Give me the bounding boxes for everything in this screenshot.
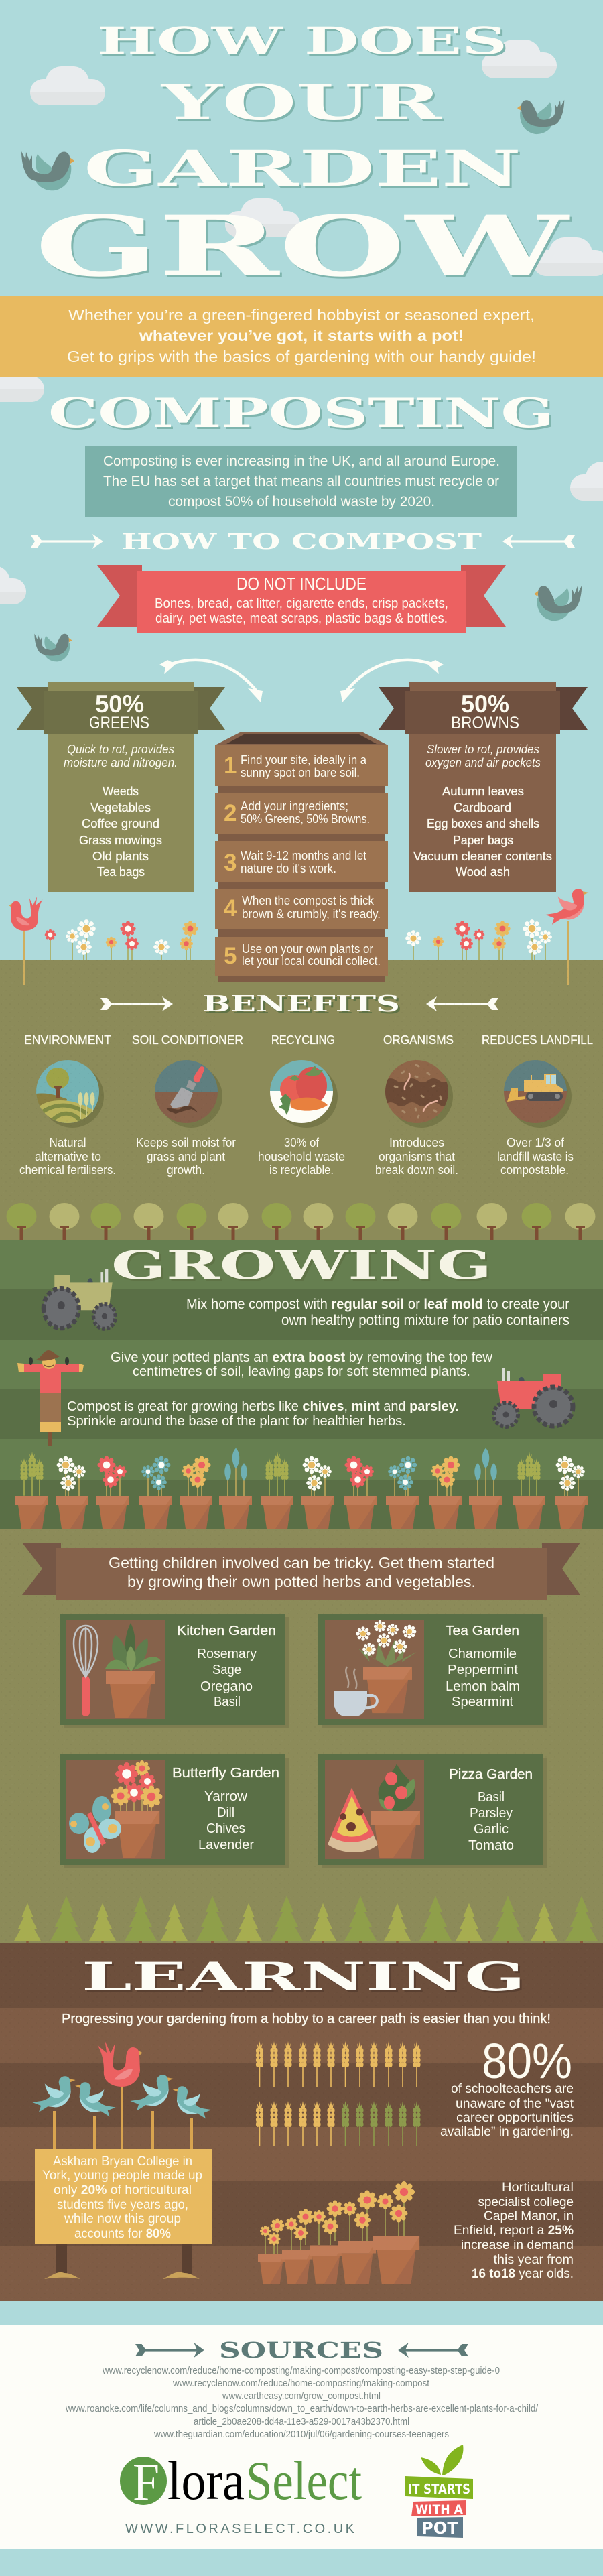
benefit descriptions: household waste	[258, 1150, 345, 1163]
panel: 50% browns: Wood ash	[456, 865, 510, 879]
clouds in the header sky	[0, 40, 603, 604]
logo: FloraSelect: lora	[168, 2450, 245, 2511]
card: butterfly garden	[60, 1754, 289, 1868]
composting intro panel: The EU has set a target that means all countries must recycle or	[103, 474, 499, 489]
card: kitchen garden: Basil	[214, 1695, 241, 1710]
heading: how to compost: HOW TO COMPOST	[121, 529, 482, 554]
panel: sources: article_2b0ae208-dd4a-11e3-a529-0017a43b2370.html	[194, 2417, 409, 2427]
icon: red tractor	[494, 1368, 573, 1427]
statistic: Capel Manor: 16 to18 year olds.	[472, 2267, 574, 2281]
ribbon: do not include: DO NOT INCLUDE	[237, 574, 366, 594]
signboard: Askham Bryan College: accounts for 80%	[74, 2227, 171, 2241]
benefit descriptions	[19, 1136, 574, 1177]
heading: sources	[135, 2337, 468, 2363]
card: pizza garden: Garlic	[474, 1822, 509, 1837]
birds on posts	[32, 2041, 212, 2154]
heading: sources: SOURCES	[219, 2337, 383, 2363]
benefit descriptions: compostable.	[500, 1163, 569, 1177]
title	[35, 19, 570, 296]
logo: It Starts With A Pot: POT	[421, 2518, 458, 2538]
compost bin with five steps: sunny spot on bare soil.	[241, 766, 360, 779]
icon: chamomile pot and cup	[334, 1622, 417, 1716]
panel: sources: www.eartheasy.com/grow_compost.html	[222, 2391, 381, 2402]
row of round trees	[7, 1203, 595, 1243]
panel: 50% greens: Weeds	[103, 785, 139, 798]
panel: sources	[0, 2325, 603, 2549]
heading: benefits	[100, 990, 498, 1017]
icon: pizza slice and tomato plant	[328, 1764, 420, 1858]
panel: 50% browns: 50%	[461, 690, 509, 718]
statistic: 80% of schoolteachers: career opportunities	[456, 2111, 574, 2125]
statistic: 80% of schoolteachers: unaware of the "vast	[456, 2097, 574, 2111]
panel: 50% browns: Slower to rot, provides	[427, 743, 539, 756]
benefit descriptions: is recyclable.	[269, 1163, 334, 1177]
heading: learning: LEARNING	[82, 1954, 525, 2000]
panel: 50% browns: Cardboard	[454, 801, 511, 814]
benefit descriptions: Introduces	[389, 1136, 444, 1149]
panel: sources: www.roanoke.com/life/columns_and_blogs/columns/down_to_earth/down-to-earth-herbs-are-excellent-plants-for-a-child/	[65, 2404, 539, 2414]
card: pizza garden: Tomato	[468, 1838, 514, 1853]
benefit descriptions: landfill waste is	[497, 1150, 574, 1163]
icon: olive tractor	[44, 1269, 115, 1329]
card: tea garden: Peppermint	[448, 1663, 518, 1677]
icon: tomatoes and carrot	[270, 1060, 338, 1128]
ribbon: do not include: Bones, bread, cat litter, cigarette ends, crisp packets,	[155, 596, 448, 611]
icon: scarecrow	[17, 1350, 84, 1446]
compost bin with five steps: 4	[224, 895, 237, 921]
growing tips text: Mix home compost with regular soil or leaf mold to create your	[186, 1297, 570, 1312]
compost bin with five steps: 5	[224, 943, 237, 969]
statistic: Capel Manor: Capel Manor, in	[484, 2209, 574, 2224]
arrows into compost bin	[159, 660, 444, 702]
title: GROW	[35, 198, 570, 296]
row of pine trees	[14, 1896, 598, 1945]
statistic: 80% of schoolteachers: 80%	[482, 2033, 572, 2089]
row of potted plants	[15, 1448, 588, 1529]
icon: birds beside ribbon	[34, 586, 582, 661]
panel: 50% greens: Tea bags	[97, 865, 145, 879]
growing tips text: Give your potted plants an extra boost by removing the top few	[111, 1350, 493, 1365]
card: butterfly garden: Lavender	[198, 1838, 254, 1852]
card: kitchen garden: Kitchen Garden	[177, 1624, 276, 1638]
panel: growing field stripes	[0, 1240, 603, 1529]
benefit column headings	[24, 1033, 593, 1047]
panel: 50% browns: Paper bags	[453, 834, 513, 847]
compost bin with five steps: Add your ingredients;	[241, 799, 348, 813]
logo: It Starts With A Pot: WITH A	[415, 2502, 463, 2517]
icon: soil layers and worms	[385, 1060, 453, 1128]
benefit descriptions: grass and plant	[147, 1150, 225, 1163]
logo: It Starts With A Pot: IT STARTS	[408, 2481, 470, 2497]
logo: It Starts With A Pot	[405, 2445, 473, 2538]
composting intro panel: Composting is ever increasing in the UK, and all around Europe.	[103, 454, 500, 469]
card: pizza garden	[318, 1754, 547, 1868]
panel: 50% browns	[379, 682, 588, 892]
statistic: Capel Manor	[454, 2181, 574, 2281]
card: kitchen garden	[60, 1614, 289, 1728]
statistic: Capel Manor: increase in demand	[461, 2238, 574, 2252]
ribbon: do not include	[97, 565, 506, 633]
panel: 50% greens: GREENS	[89, 714, 149, 732]
benefit column headings: RECYCLING	[271, 1033, 335, 1047]
compost bin with five steps	[215, 732, 388, 982]
benefit column headings: SOIL CONDITIONER	[132, 1033, 243, 1047]
card: kitchen garden: Oregano	[200, 1679, 253, 1694]
compost bin with five steps: When the compost is thick	[242, 894, 375, 907]
ground: flower meadow strip	[0, 960, 603, 1240]
compost bin with five steps: 1	[224, 753, 237, 779]
card: butterfly garden: Dill	[217, 1805, 234, 1820]
logo: FloraSelect	[120, 2450, 362, 2536]
growing tips text: centimetres of soil, leaving gaps for soft stemmed plants.	[133, 1364, 470, 1379]
panel: 50% greens: Coffee ground	[82, 817, 159, 830]
title: HOW DOES	[97, 19, 507, 62]
compost bin with five steps: Wait 9-12 months and let	[241, 849, 366, 862]
growing tips text: Sprinkle around the base of the plant for healthier herbs.	[67, 1414, 406, 1429]
benefit column headings: ORGANISMS	[383, 1033, 454, 1047]
ribbon: getting children involved: Getting children involved can be tricky. Get them started	[109, 1554, 494, 1571]
benefit descriptions: break down soil.	[375, 1163, 458, 1177]
panel: 50% greens	[17, 682, 225, 892]
panel: 50% browns: Autumn leaves	[442, 785, 524, 798]
intro banner: Get to grips with the basics of gardening with our handy guide!	[67, 348, 536, 365]
ribbon: getting children involved: by growing their own potted herbs and vegetables.	[127, 1573, 476, 1590]
panel: 50% greens: Grass mowings	[79, 834, 162, 847]
heading: growing: GROWING	[111, 1242, 492, 1288]
statistic: Capel Manor: Enfield, report a 25%	[454, 2224, 574, 2238]
card: pizza garden: Basil	[478, 1790, 505, 1805]
heading: composting: COMPOSTING	[48, 390, 554, 437]
card: tea garden: Chamomile	[448, 1647, 517, 1661]
panel: 50% browns: Vacuum cleaner contents	[413, 850, 552, 863]
compost bin with five steps: Find your site, ideally in a	[241, 753, 367, 767]
card: tea garden: Tea Garden	[446, 1624, 519, 1638]
compost bin with five steps: 2	[224, 800, 237, 826]
wheat chart: 80% of twelve	[256, 2041, 421, 2146]
statistic: 80% of schoolteachers: available” in gardening.	[440, 2125, 574, 2139]
intro banner: Whether you’re a green-fingered hobbyist or seasoned expert,	[68, 306, 535, 324]
compost bin with five steps: 50% Greens, 50% Browns.	[241, 812, 370, 826]
card: butterfly garden: Butterfly Garden	[172, 1766, 279, 1781]
signboard: Askham Bryan College: while now this group	[64, 2212, 181, 2226]
panel: 50% browns: Egg boxes and shells	[427, 817, 539, 830]
icon: potted herb	[105, 1623, 161, 1718]
logo: FloraSelect: WWW.FLORASELECT.CO.UK	[125, 2522, 355, 2536]
icon: bulldozer	[504, 1060, 572, 1128]
card: tea garden	[318, 1614, 547, 1728]
panel: sources: www.recyclenow.com/reduce/home-composting/making-compost/composting-easy-step-step-guide-0	[102, 2366, 500, 2376]
card: kitchen garden: Rosemary	[197, 1647, 257, 1661]
logo: FloraSelect: F	[133, 2453, 159, 2512]
growing pots illustration	[258, 2184, 419, 2284]
panel: learning soil stripes	[0, 1943, 603, 2301]
compost bin with five steps: 3	[224, 850, 237, 876]
statistic: Capel Manor: Horticultural	[502, 2181, 574, 2195]
icon: header birds	[21, 100, 564, 190]
card: kitchen garden: Sage	[212, 1663, 241, 1677]
statistic: 80% of schoolteachers	[440, 2033, 574, 2139]
ribbon: getting children involved	[22, 1543, 580, 1600]
card: tea garden: Spearmint	[452, 1695, 513, 1710]
benefit descriptions: chemical fertilisers.	[19, 1163, 116, 1177]
benefit descriptions: alternative to	[35, 1150, 101, 1163]
icon: garden trowel in soil	[155, 1060, 222, 1128]
card: pizza garden: Pizza Garden	[449, 1767, 533, 1782]
benefit column headings: REDUCES LANDFILL	[482, 1033, 593, 1047]
composting intro panel	[85, 446, 517, 517]
title: GARDEN	[84, 140, 521, 198]
statistic: 80% of schoolteachers: of schoolteachers are	[451, 2082, 574, 2096]
panel: olive ground for children's gardens	[0, 1529, 603, 1944]
heading: benefits: BENEFITS	[202, 990, 400, 1017]
icon: flowers and butterfly	[69, 1762, 159, 1858]
learning intro line: Progressing your gardening from a hobby to a career path is easier than you think!	[62, 2012, 551, 2026]
signboard: Askham Bryan College: York, young people made up	[42, 2169, 202, 2183]
flowers and birds along the meadow	[9, 889, 589, 985]
icon: whisk	[74, 1626, 98, 1716]
panel: sources: www.theguardian.com/education/2010/jul/06/gardening-courses-teenagers	[153, 2429, 449, 2440]
panel: 50% greens: 50%	[95, 690, 144, 718]
panel: 50% browns: oxygen and air pockets	[425, 756, 541, 769]
ribbon: do not include: dairy, pet waste, meat scraps, plastic bags & bottles.	[155, 611, 448, 626]
card: butterfly garden: Chives	[206, 1821, 245, 1836]
panel: 50% greens: Old plants	[92, 850, 149, 863]
signboard: Askham Bryan College	[35, 2149, 212, 2279]
icon: environment landscape	[36, 1060, 104, 1128]
ground texture	[0, 960, 603, 1203]
panel: sources: www.recyclenow.com/reduce/home-composting/making-compost	[172, 2378, 429, 2389]
signboard: Askham Bryan College: students five years ago,	[57, 2198, 188, 2212]
intro banner	[0, 296, 603, 377]
benefit descriptions: growth.	[167, 1163, 205, 1177]
intro banner: whatever you’ve got, it starts with a pot!	[139, 327, 464, 344]
panel: 50% greens: Quick to rot, provides	[67, 743, 174, 756]
benefit descriptions: Over 1/3 of	[507, 1136, 565, 1149]
signboard: Askham Bryan College: only 20% of horticultural	[54, 2183, 192, 2197]
card: tea garden: Lemon balm	[446, 1679, 520, 1694]
card: butterfly garden: Yarrow	[204, 1789, 248, 1804]
composting intro panel: compost 50% of household waste by 2020.	[168, 494, 435, 509]
compost bin with five steps: let your local council collect.	[242, 954, 381, 968]
benefit column headings: ENVIRONMENT	[24, 1033, 111, 1047]
card: pizza garden: Parsley	[470, 1806, 513, 1821]
title: YOUR	[160, 74, 443, 131]
panel: 50% browns: BROWNS	[451, 714, 519, 732]
compost bin with five steps: nature do it's work.	[241, 862, 336, 875]
benefit descriptions: Natural	[50, 1136, 86, 1149]
growing tips text: own healthy potting mixture for patio containers	[281, 1313, 570, 1328]
benefit descriptions: organisms that	[379, 1150, 455, 1163]
benefit descriptions: 30% of	[284, 1136, 320, 1149]
panel: 50% greens: moisture and nitrogen.	[64, 756, 178, 769]
growing tips text: Compost is great for growing herbs like chives, mint and parsley.	[67, 1399, 459, 1414]
compost bin with five steps: Use on your own plants or	[242, 942, 373, 956]
statistic: Capel Manor: this year from	[493, 2253, 574, 2267]
compost bin with five steps: brown & crumbly, it's ready.	[242, 907, 381, 921]
benefit descriptions: Keeps soil moist for	[136, 1136, 236, 1149]
growing tips text	[67, 1297, 570, 1429]
logo: FloraSelect: Select	[246, 2450, 362, 2511]
heading: how to compost	[31, 529, 575, 554]
statistic: Capel Manor: specialist college	[478, 2195, 574, 2209]
signboard: Askham Bryan College: Askham Bryan College in	[53, 2154, 192, 2169]
panel: 50% greens: Vegetables	[90, 801, 151, 814]
